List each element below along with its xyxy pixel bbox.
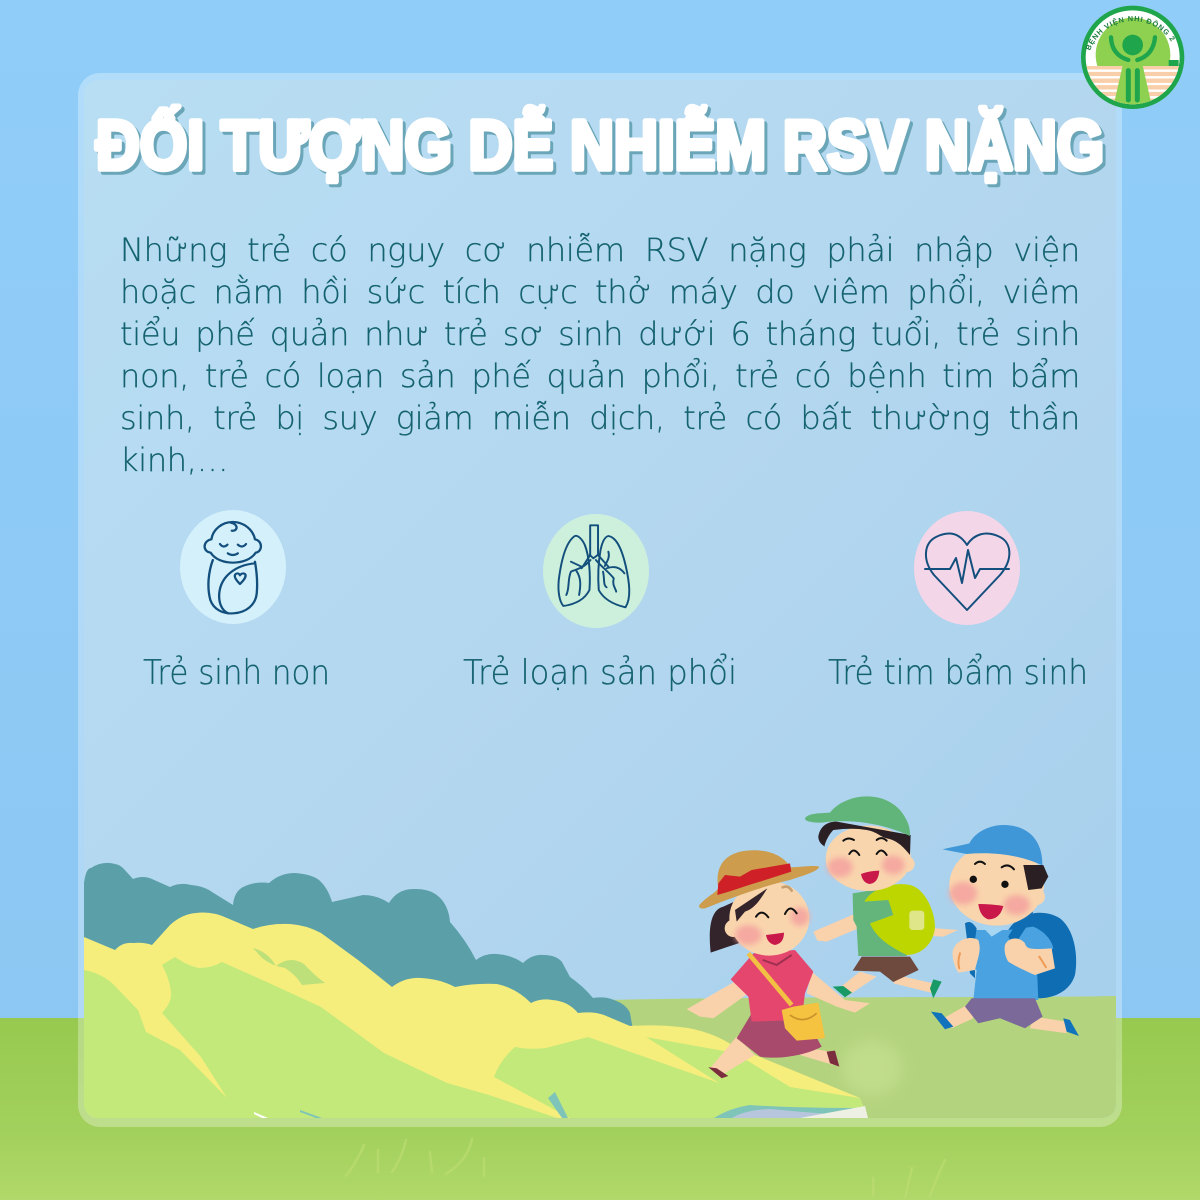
label: Trẻ loạn sản phổi: Trẻ loạn sản phổi	[463, 653, 737, 693]
children illustration	[687, 796, 1079, 1078]
logo: Bệnh viện Nhi Đồng 2: BỆNH VIỆN NHI ĐỒNG 2	[1086, 16, 1175, 50]
icon: lungs	[543, 514, 649, 628]
grass tufts	[346, 1139, 945, 1198]
label: Trẻ sinh non: Trẻ sinh non	[143, 653, 330, 693]
background grass	[0, 1018, 1200, 1200]
hill: yellow ridge	[84, 913, 868, 1118]
body paragraph: non, trẻ có loạn sản phế quản phổi, trẻ có bệnh tim bẩm	[120, 357, 1080, 395]
child: boy with blue cap	[931, 825, 1079, 1036]
body paragraph	[120, 231, 1080, 479]
hill: light green slope	[84, 957, 868, 1118]
icon: swaddled baby	[180, 510, 286, 624]
child: girl with straw hat	[687, 850, 870, 1078]
glass panel	[78, 73, 1122, 1127]
logo: Bệnh viện Nhi Đồng 2	[1081, 6, 1184, 109]
body paragraph: Những trẻ có nguy cơ nhiễm RSV nặng phải nhập viện	[120, 231, 1080, 269]
hill: teal back ridge	[84, 862, 632, 1026]
body paragraph: sinh, trẻ bị suy giảm miễn dịch, trẻ có bất thường thần	[120, 399, 1080, 437]
icon: heart with pulse	[914, 511, 1020, 625]
body paragraph: tiểu phế quản như trẻ sơ sinh dưới 6 tháng tuổi, trẻ sinh	[120, 315, 1080, 353]
label: Trẻ tim bẩm sinh: Trẻ tim bẩm sinh	[828, 653, 1088, 693]
hill illustration	[84, 863, 868, 1118]
panel meadow	[600, 996, 1116, 1118]
hill: puddle	[254, 1092, 868, 1118]
child: boy with green cap	[805, 796, 958, 998]
body paragraph: hoặc nằm hồi sức tích cực thở máy do viêm phổi, viêm	[120, 273, 1080, 311]
body paragraph: kinh,…	[120, 441, 228, 479]
hill: small green patch	[253, 948, 325, 985]
